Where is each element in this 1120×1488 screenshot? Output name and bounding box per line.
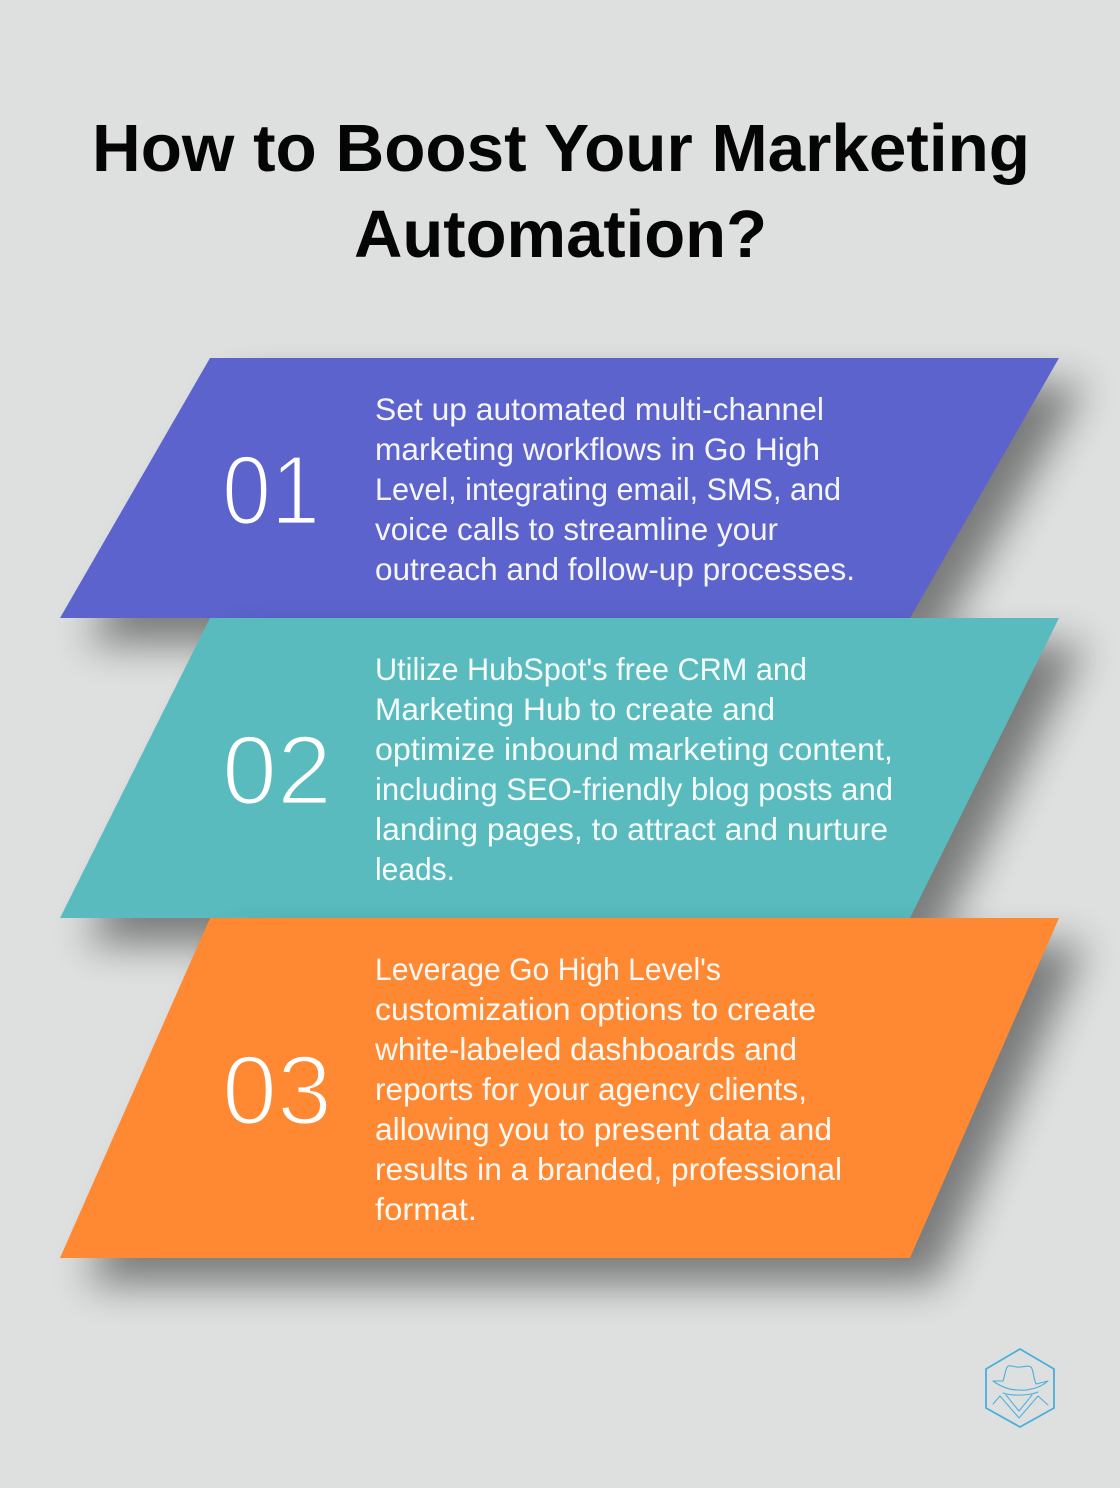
text: step 03: white-labeled dashboards and: [374, 1031, 797, 1067]
number: 02: 02: [222, 715, 332, 825]
text: step 02: landing pages, to attract and nurture: [375, 811, 888, 847]
panel: step 01: [60, 358, 1085, 644]
title: [92, 111, 1030, 272]
text: step 02: including SEO-friendly blog posts and: [375, 771, 893, 807]
text: step 01: marketing workflows in Go High: [375, 431, 820, 467]
text: step 02: Utilize HubSpot's free CRM and: [375, 651, 807, 687]
text: step 02: [375, 651, 893, 887]
panel: step 03: [60, 918, 1085, 1284]
text: step 02: optimize inbound marketing content,: [375, 731, 893, 767]
text: step 01: [375, 391, 855, 587]
text: step 03: Leverage Go High Level's: [375, 951, 721, 987]
text: step 01: Level, integrating email, SMS, and: [375, 471, 841, 507]
text: step 03: reports for your agency clients,: [375, 1071, 807, 1107]
text: step 01: voice calls to streamline your: [375, 511, 778, 547]
panel: step 02: [60, 618, 1085, 944]
parallelogram: step 01: [60, 358, 1059, 618]
title: How to Boost Your Marketing: [92, 111, 1030, 186]
text: step 01: outreach and follow-up processes.: [375, 551, 855, 587]
text: step 02: Marketing Hub to create and: [375, 691, 775, 727]
title: Automation?: [354, 197, 767, 272]
text: step 01: Set up automated multi-channel: [375, 391, 824, 427]
text: step 03: customization options to create: [375, 991, 816, 1027]
text: step 03: format.: [375, 1191, 477, 1227]
text: step 03: [374, 951, 842, 1227]
parallelogram: step 02: [60, 618, 1059, 918]
number: 03: 03: [222, 1035, 332, 1145]
text: step 03: allowing you to present data and: [375, 1111, 832, 1147]
number: 01: 01: [222, 435, 320, 545]
text: step 03: results in a branded, professional: [375, 1151, 842, 1187]
parallelogram: step 03: [60, 918, 1059, 1258]
text: step 02: leads.: [375, 851, 455, 887]
icon: hexagon spy logo: [986, 1349, 1054, 1427]
